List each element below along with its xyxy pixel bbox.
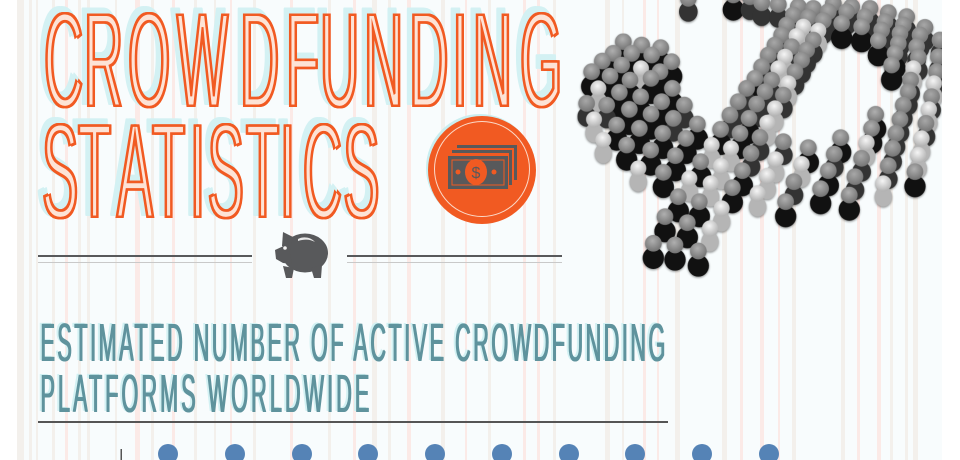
title: crowdfunding statistics: STATISTICS [41, 95, 378, 247]
subheading: estimated number of active crowdfunding platforms worldwide [38, 311, 666, 424]
subheading: estimated number of active crowdfunding platforms worldwide: ESTIMATED NUMBER OF ACTIVE CROWDFUNDING [38, 311, 663, 372]
icon: piggy bank [275, 232, 328, 278]
subheading: estimated number of active crowdfunding platforms worldwide: PLATFORMS WORLDWIDE [41, 363, 370, 424]
title: crowdfunding statistics: STATISTICS [39, 91, 376, 243]
title: crowdfunding statistics [38, 6, 560, 220]
chart axis [120, 449, 122, 460]
crowd of figures forming a check mark [577, 0, 949, 277]
subheading: estimated number of active crowdfunding platforms worldwide: ESTIMATED NUMBER OF ACTIVE CROWDFUNDING [40, 312, 665, 373]
title: crowdfunding statistics: STATISTICS [44, 95, 381, 247]
title: crowdfunding statistics: STATISTICS [42, 95, 379, 247]
subheading: estimated number of active crowdfunding platforms worldwide: ESTIMATED NUMBER OF ACTIVE CROWDFUNDING [41, 312, 666, 373]
dot row chart [158, 444, 779, 460]
subheading: estimated number of active crowdfunding platforms worldwide: PLATFORMS WORLDWIDE [38, 362, 367, 423]
subheading: estimated number of active crowdfunding platforms worldwide: PLATFORMS WORLDWIDE [40, 363, 369, 424]
subheading rule [38, 421, 668, 423]
title: crowdfunding statistics: STATISTICS [36, 91, 373, 243]
divider left [38, 255, 252, 263]
divider right [347, 255, 562, 263]
icon: money badge [426, 114, 536, 224]
icon: money badge: $ [472, 165, 481, 182]
